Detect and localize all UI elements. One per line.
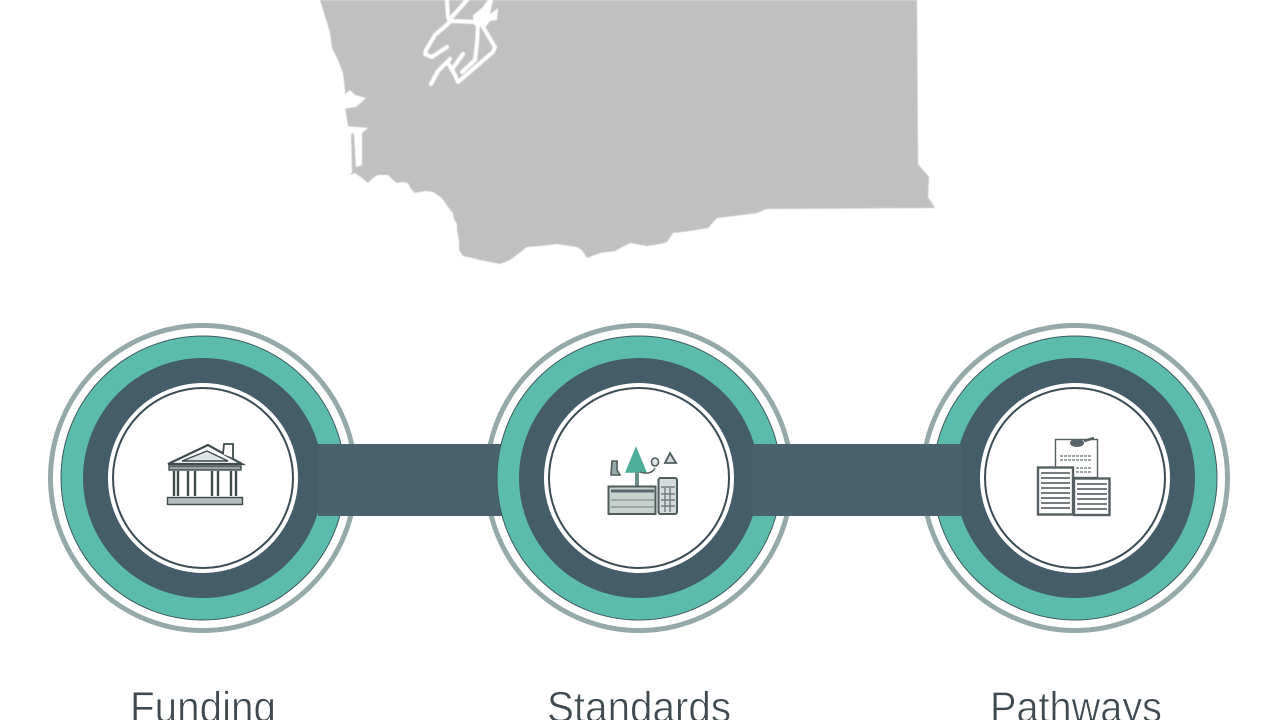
icon: tree, keyboard and calculator	[608, 448, 677, 514]
Puget Sound inlets	[425, 0, 495, 84]
step circle 3: Pathways	[922, 326, 1228, 630]
connector: Funding to Standards	[318, 444, 512, 516]
icon: documents and books	[1038, 438, 1110, 515]
icon: government building	[168, 444, 242, 504]
step circle 2 outer ring	[486, 326, 792, 630]
step circle 2: Standards	[497, 336, 781, 620]
Willapa Bay	[345, 126, 368, 176]
Grays Harbor	[342, 90, 366, 109]
connector: Standards to Pathways	[752, 444, 962, 516]
step circle 1: Funding	[50, 326, 356, 630]
map: Washington state silhouette	[320, 0, 935, 264]
